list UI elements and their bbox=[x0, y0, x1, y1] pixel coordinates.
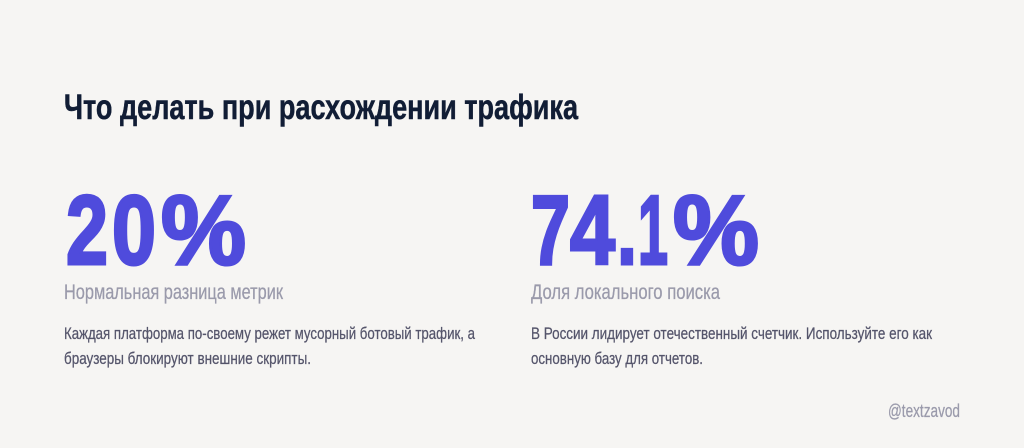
big number: 74.1%: 7 bbox=[531, 175, 570, 285]
description: Каждая платформа по-своему режет мусорный ботовый трафик, а bbox=[64, 324, 475, 343]
big number: 74.1%: % bbox=[673, 175, 759, 285]
big number: 20%: % bbox=[161, 175, 246, 285]
big number: 74.1% bbox=[531, 175, 759, 285]
panel: normal metric difference bbox=[64, 175, 475, 368]
metric label: Нормальная разница метрик bbox=[64, 281, 284, 304]
big number: 74.1%: 1 bbox=[638, 175, 668, 285]
big number: 20%: 2 bbox=[66, 175, 108, 285]
big number: 74.1%: 4 bbox=[570, 175, 615, 285]
big number: 20% bbox=[66, 175, 246, 285]
description: В России лидирует отечественный счетчик. Используйте его как bbox=[531, 324, 932, 343]
big number: 74.1%: . bbox=[617, 175, 637, 285]
description bbox=[531, 324, 932, 368]
panel: local search share bbox=[531, 175, 932, 368]
description: основную базу для отчетов. bbox=[531, 349, 703, 368]
description bbox=[64, 324, 475, 368]
metric label: Доля локального поиска bbox=[531, 281, 720, 304]
big number: 20%: 0 bbox=[112, 175, 156, 285]
title: Что делать при расхождении трафика bbox=[64, 88, 578, 127]
description: браузеры блокируют внешние скрипты. bbox=[64, 349, 311, 368]
source handle: @textzavod bbox=[888, 401, 960, 421]
